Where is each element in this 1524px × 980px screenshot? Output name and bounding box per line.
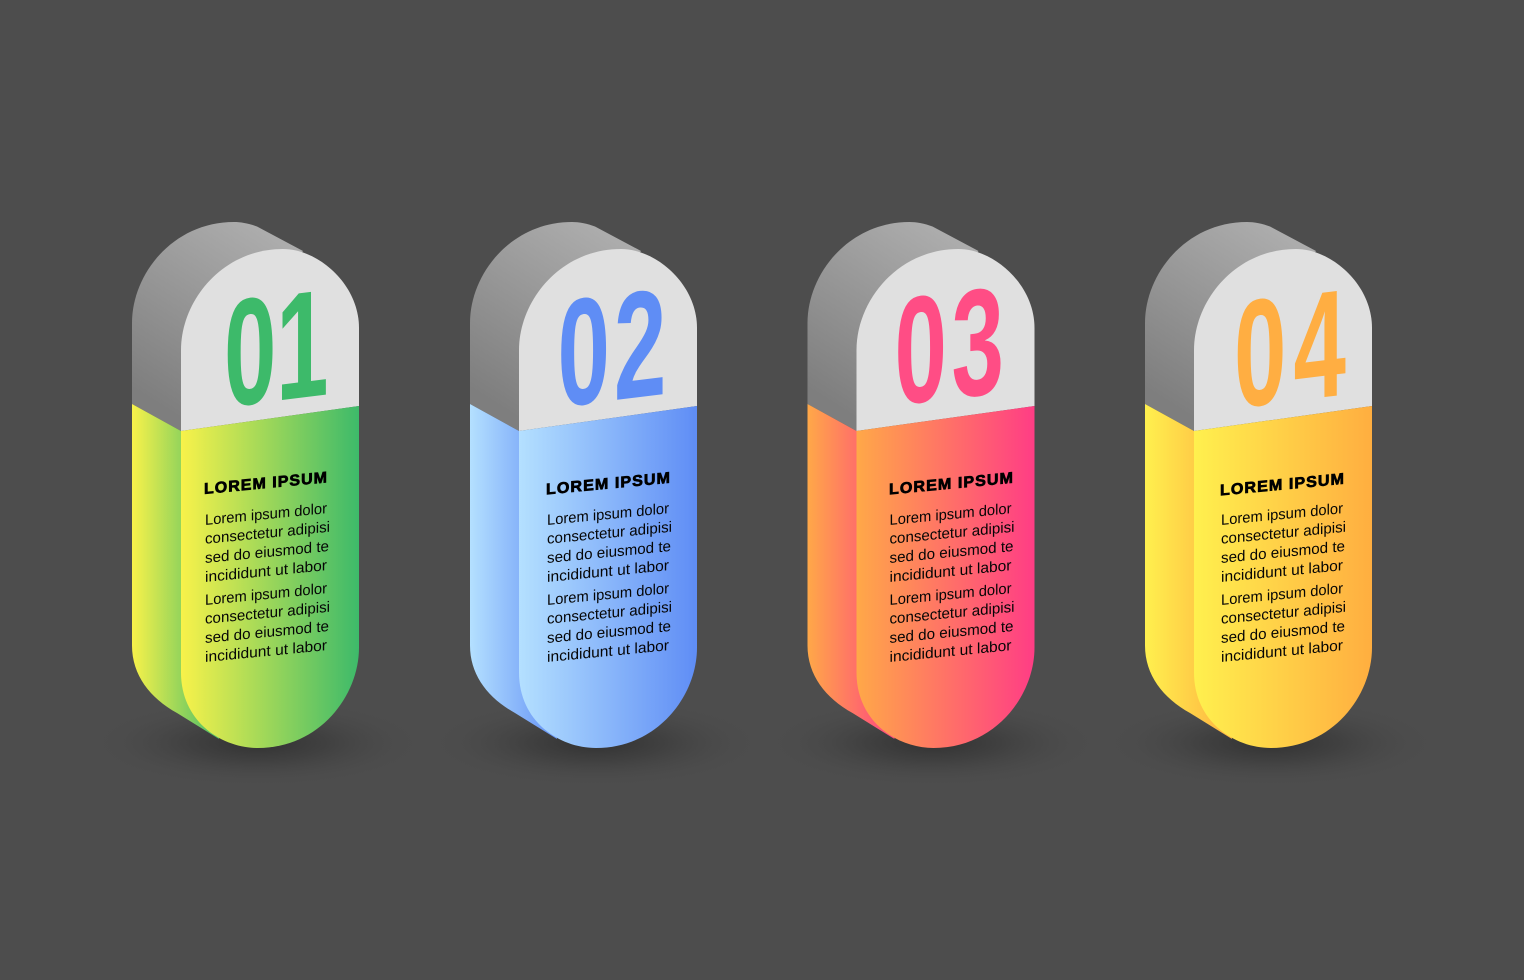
heading: LOREM IPSUM xyxy=(204,469,328,498)
side: grey top xyxy=(808,222,978,431)
body text xyxy=(1221,500,1346,666)
body text xyxy=(547,500,672,666)
number 02: 02 xyxy=(558,256,666,439)
body text: incididunt ut labor xyxy=(1221,637,1343,666)
panel: card 02 xyxy=(426,222,766,788)
body text: sed do eiusmod te xyxy=(1221,538,1345,567)
body text: Lorem ipsum dolor xyxy=(205,500,327,529)
heading: LOREM IPSUM xyxy=(889,470,1014,498)
front: cap xyxy=(519,249,697,431)
body text: consectetur adipisi xyxy=(547,519,672,548)
front: cap xyxy=(856,249,1034,431)
side: grey top xyxy=(132,222,303,431)
body text: consectetur adipisi xyxy=(1221,599,1346,628)
body text: Lorem ipsum dolor xyxy=(547,500,669,529)
body text xyxy=(890,500,1014,666)
number 04: 04 xyxy=(1234,257,1346,440)
body text: sed do eiusmod te xyxy=(1221,618,1345,647)
shadow xyxy=(764,698,1104,788)
front: coloured body xyxy=(856,406,1034,748)
side: coloured xyxy=(1145,404,1232,739)
heading: LOREM IPSUM xyxy=(546,470,671,498)
side: grey top xyxy=(1145,222,1316,431)
body text: Lorem ipsum dolor xyxy=(890,500,1011,529)
body text: consectetur adipisi xyxy=(547,599,672,628)
body text: incididunt ut labor xyxy=(890,557,1011,586)
side: coloured xyxy=(470,404,557,739)
body text: consectetur adipisi xyxy=(205,599,330,628)
shadow xyxy=(1101,698,1441,788)
body text: incididunt ut labor xyxy=(890,637,1011,666)
body text xyxy=(205,500,330,666)
body text: sed do eiusmod te xyxy=(547,618,671,647)
side: grey top xyxy=(470,222,641,431)
body text: sed do eiusmod te xyxy=(205,538,329,567)
shadow xyxy=(426,698,766,788)
body text: sed do eiusmod te xyxy=(547,538,671,567)
body text: consectetur adipisi xyxy=(890,599,1014,628)
body text: incididunt ut labor xyxy=(547,557,669,586)
shadow xyxy=(88,698,428,788)
body text: consectetur adipisi xyxy=(205,519,330,548)
number 01: 01 xyxy=(224,256,328,439)
body text: Lorem ipsum dolor xyxy=(890,580,1011,609)
body text: incididunt ut labor xyxy=(205,557,327,586)
body text: incididunt ut labor xyxy=(1221,557,1343,586)
body text: incididunt ut labor xyxy=(547,637,669,666)
front: cap xyxy=(1194,249,1372,431)
body text: incididunt ut labor xyxy=(205,637,327,666)
front: coloured body xyxy=(1194,406,1372,748)
front: coloured body xyxy=(519,406,697,748)
body text: Lorem ipsum dolor xyxy=(205,580,327,609)
front: coloured body xyxy=(181,406,359,748)
body text: Lorem ipsum dolor xyxy=(547,580,669,609)
panel: card 04 xyxy=(1101,222,1441,788)
heading: LOREM IPSUM xyxy=(1220,471,1345,499)
body text: Lorem ipsum dolor xyxy=(1221,500,1343,529)
front: cap xyxy=(181,249,359,431)
body text: Lorem ipsum dolor xyxy=(1221,580,1343,609)
side: coloured xyxy=(808,404,894,739)
panel: card 03 xyxy=(764,222,1104,788)
number 03: 03 xyxy=(894,254,1004,437)
body text: consectetur adipisi xyxy=(1221,519,1346,548)
panel: card 01 xyxy=(88,222,428,788)
side: coloured xyxy=(132,404,219,739)
body text: consectetur adipisi xyxy=(890,519,1014,548)
body text: sed do eiusmod te xyxy=(890,618,1013,647)
body text: sed do eiusmod te xyxy=(890,538,1013,567)
body text: sed do eiusmod te xyxy=(205,618,329,647)
